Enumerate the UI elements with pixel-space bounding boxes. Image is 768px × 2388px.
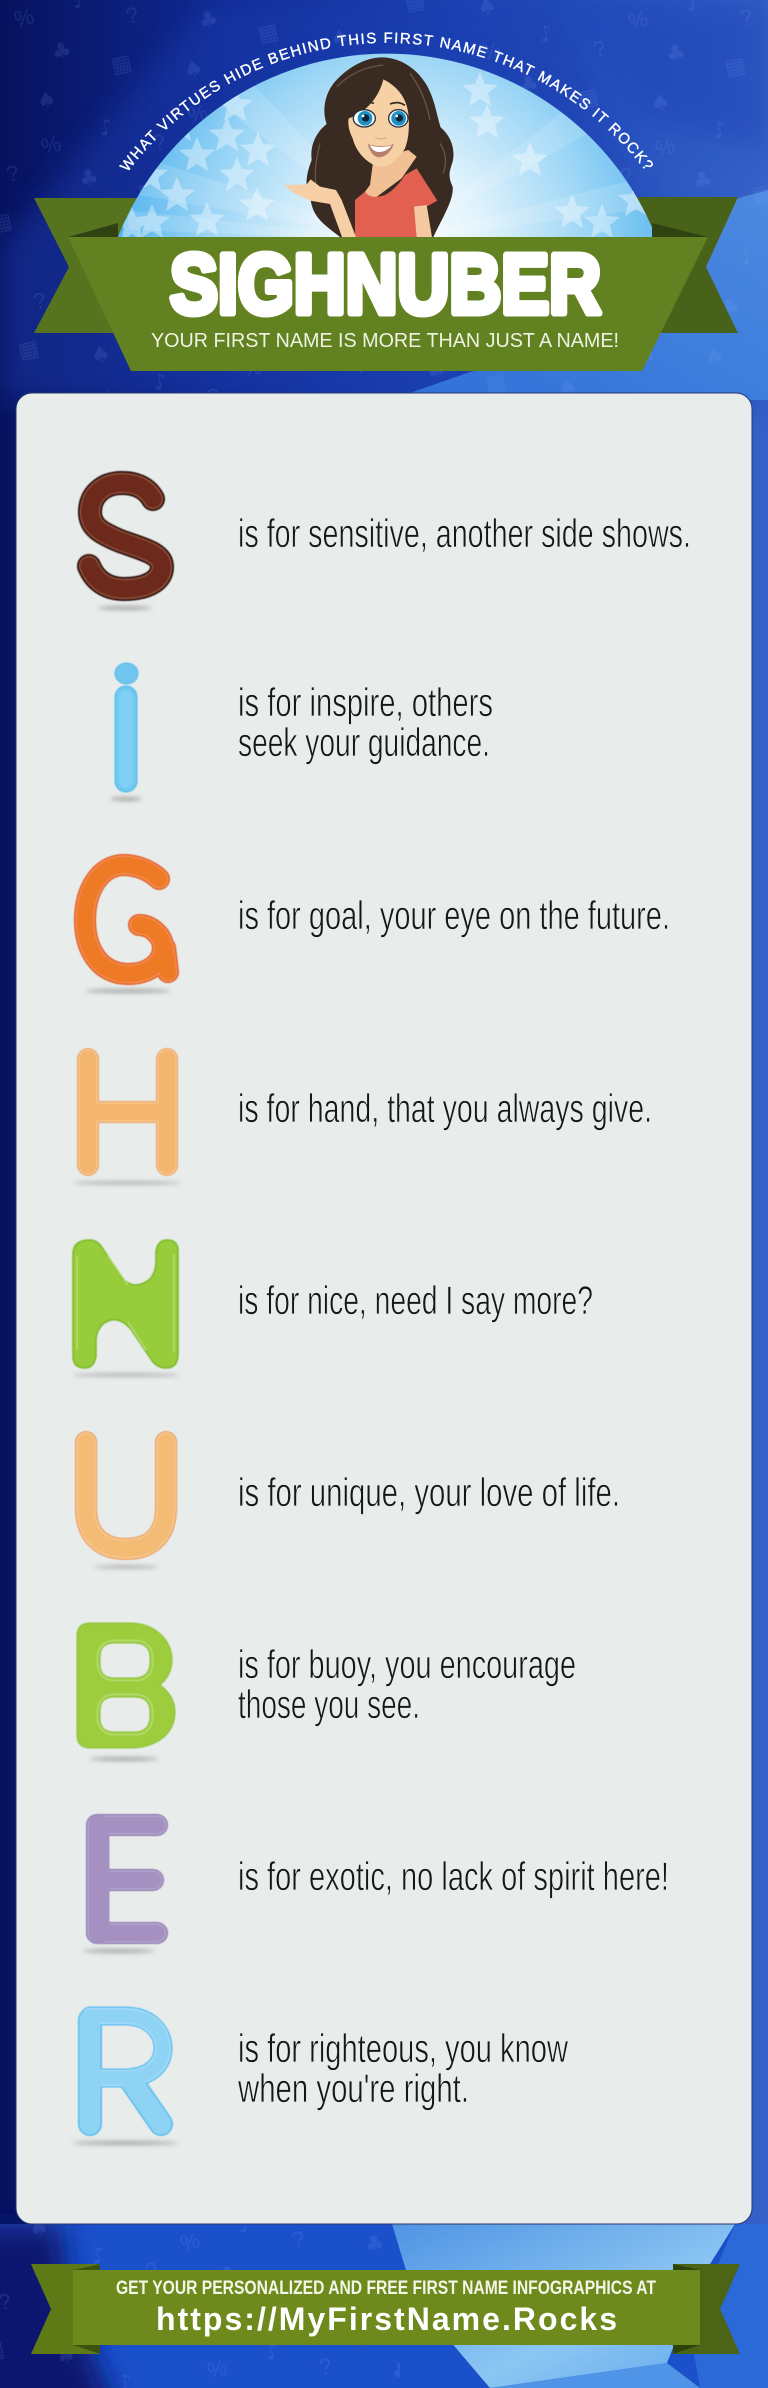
eyes xyxy=(353,103,408,127)
shirt xyxy=(355,168,437,237)
text: R xyxy=(237,2027,568,2111)
text: B: is for buoy, you encourage xyxy=(238,1643,576,1687)
sunburst circle with stars xyxy=(118,54,652,237)
text: I: seek your guidance. xyxy=(238,721,490,765)
curved tagline: WHAT VIRTUES HIDE BEHIND THIS FIRST NAME THAT MAKES IT ROCK? xyxy=(118,32,653,170)
text: R: when you're right. xyxy=(237,2067,469,2111)
panel: letters xyxy=(16,393,752,2224)
face xyxy=(348,79,409,167)
row: N xyxy=(72,1240,593,1376)
row: G xyxy=(85,865,670,993)
icon: letter N xyxy=(72,1240,180,1376)
icon: letter H xyxy=(73,1059,181,1184)
row: U xyxy=(86,1442,620,1568)
row: H xyxy=(73,1059,652,1184)
hand xyxy=(284,179,356,237)
row: I xyxy=(110,663,493,801)
panel background xyxy=(16,393,752,2224)
text: I: is for inspire, others xyxy=(238,681,493,725)
subtitle: YOUR FIRST NAME IS MORE THAN JUST A NAME! xyxy=(151,330,619,352)
icon: letter S xyxy=(89,483,162,610)
banner tails xyxy=(31,2264,740,2354)
text: B xyxy=(238,1643,576,1727)
icon: letter R xyxy=(72,2016,178,2145)
hair xyxy=(307,57,453,237)
main ribbon xyxy=(68,237,708,371)
text: R: is for righteous, you know xyxy=(238,2027,568,2071)
arm xyxy=(414,205,432,237)
row: S xyxy=(89,483,691,610)
text: U: is for unique, your love of life. xyxy=(238,1471,620,1515)
row: B xyxy=(77,1623,576,1761)
mouth xyxy=(368,144,394,157)
banner front xyxy=(73,2270,700,2345)
icon: letter G xyxy=(85,865,171,993)
header: sunburst circle, ribbon and name xyxy=(34,32,738,371)
ribbon tails xyxy=(34,197,738,333)
ribbon folds xyxy=(68,223,708,237)
footer banner xyxy=(31,2264,740,2354)
icon: letter i xyxy=(110,663,142,801)
name title: SIGHNUBER xyxy=(170,237,601,331)
icon: letter E xyxy=(83,1825,157,1953)
text: N: is for nice, need I say more? xyxy=(238,1279,593,1323)
icon: letter U xyxy=(86,1442,166,1568)
neck and chest xyxy=(363,150,417,199)
row: R xyxy=(72,2016,568,2145)
text: B: those you see. xyxy=(238,1683,420,1727)
banner folds xyxy=(73,2264,700,2354)
character: woman xyxy=(284,57,453,237)
text: I xyxy=(238,681,493,765)
banner url: https://MyFirstName.Rocks xyxy=(156,2301,617,2337)
row: E xyxy=(83,1825,669,1953)
icon: letter B xyxy=(77,1623,175,1761)
banner call to action: GET YOUR PERSONALIZED AND FREE FIRST NAME INFOGRAPHICS AT xyxy=(116,2278,656,2299)
